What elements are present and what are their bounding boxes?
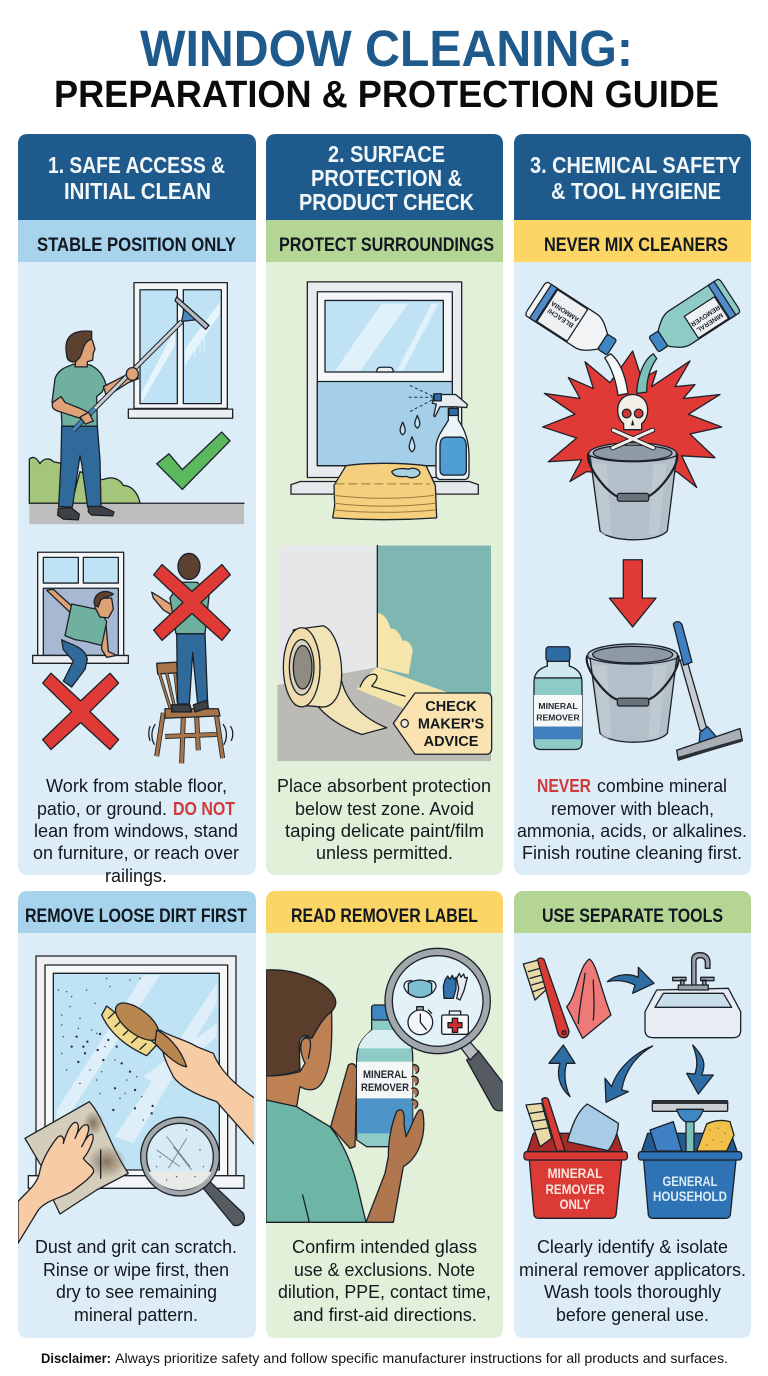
panel: use separate tools [514, 891, 751, 1338]
basket label: general household [653, 1174, 727, 1204]
heading: safe access [18, 134, 256, 220]
tag text: check maker's advice: ADVICE [424, 734, 479, 750]
arrow: to general basket [687, 1045, 713, 1094]
title: PREPARATION & PROTECTION GUIDE [54, 74, 719, 116]
illustration: safe squeegee from ground [29, 283, 244, 524]
body text: never mix: Finish routine cleaning first. [522, 842, 742, 863]
bottle label text: MINERAL [363, 1069, 407, 1081]
subheading: protect surroundings [266, 220, 503, 262]
icon: red brush and cloth [523, 958, 611, 1038]
streams, skull and bucket [588, 354, 677, 627]
tag text: check maker's advice: CHECK [425, 699, 477, 715]
illustration: brushing and wiping dirty window [18, 956, 255, 1243]
heading: chemical safety [514, 134, 751, 220]
basket label: general household: HOUSEHOLD [653, 1189, 727, 1204]
bottle label text [536, 701, 581, 722]
body text: never mix: ammonia, acids, or alkalines. [517, 820, 747, 841]
disclaimer: Disclaimer: [41, 1350, 111, 1366]
body text: remove loose dirt: Rinse or wipe first, then [43, 1259, 229, 1280]
body text: stable position [33, 775, 239, 886]
basket label: general household: GENERAL [662, 1174, 718, 1189]
scrubbing brush [102, 996, 187, 1067]
bottle label text [361, 1069, 409, 1094]
pouring bottle: bleach/ammonia [525, 281, 623, 364]
panel: protect surroundings [266, 134, 503, 875]
basket label: mineral remover only: REMOVER [546, 1182, 605, 1197]
icon: sink [645, 953, 741, 1038]
panel: stable position only [18, 134, 256, 886]
body text: protect surroundings: unless permitted. [316, 842, 453, 863]
subheading: read remover label: READ REMOVER LABEL [291, 905, 478, 927]
illustration: leaning out of window, forbidden [33, 552, 128, 749]
body text: read label: dilution, PPE, contact time, [278, 1281, 491, 1302]
pouring bottle: mineral remover [643, 278, 741, 361]
body text: read label: and first-aid directions. [293, 1304, 477, 1325]
red starburst [543, 351, 722, 487]
icon: red mineral remover basket [524, 1098, 627, 1218]
title: WINDOW CLEANING: [140, 20, 633, 77]
arrow: to sink [607, 967, 654, 993]
subheading: read remover label [266, 891, 503, 933]
illustration: mixing chemicals forbidden [525, 278, 741, 627]
wiping hand [18, 1122, 94, 1243]
body text: stable position: lean from windows, stand [34, 820, 238, 841]
heading: surface protection [266, 134, 503, 220]
bottle label text: REMOVER [361, 1082, 409, 1094]
heading: safe access: INITIAL CLEAN [64, 178, 211, 204]
illustration: masking tape on delicate paint [277, 546, 492, 761]
body text: never mix [517, 775, 747, 863]
pouring bottle: bleach/ammonia: BLEACH/ [547, 307, 575, 328]
brush hand and arm [160, 1030, 255, 1145]
tag text: check maker's advice: MAKER'S [418, 716, 484, 732]
heading: surface protection: 2. SURFACE [328, 141, 445, 167]
body text: protect surroundings [277, 775, 491, 863]
arrow: back to brush [549, 1045, 575, 1097]
panel: read remover label [266, 891, 503, 1338]
body text: never mix: remover with bleach, [551, 798, 714, 819]
body text: protect surroundings: below test zone. Avoid [295, 798, 474, 819]
icon: face mask [404, 980, 436, 997]
body text: stable position: on furniture, or reach over [33, 842, 239, 863]
body text: read label [278, 1236, 491, 1325]
body text: read label: Confirm intended glass [292, 1236, 477, 1257]
bottle label text: REMOVER [536, 712, 581, 722]
subheading: use separate tools: USE SEPARATE TOOLS [542, 905, 723, 927]
basket label: mineral remover only: ONLY [560, 1197, 590, 1212]
arrow: to mineral basket [605, 1046, 653, 1102]
heading: surface protection: PRODUCT CHECK [299, 189, 474, 215]
illustration: mineral remover bottle, clean bucket and squeegee [534, 622, 742, 760]
subheading: protect surroundings: PROTECT SURROUNDINGS [279, 234, 494, 256]
disclaimer: Always prioritize safety and follow specific manufacturer instructions for all products and surfaces. [115, 1350, 728, 1366]
pouring bottle: mineral remover: MINERAL [695, 311, 724, 333]
panel: never mix cleaners [514, 134, 751, 875]
icon: gloves [443, 973, 467, 1000]
subheading: never mix cleaners [514, 220, 751, 262]
body text: remove loose dirt: mineral pattern. [74, 1304, 198, 1325]
subheading: use separate tools [514, 891, 751, 933]
icon: stopwatch [408, 1007, 433, 1035]
illustration: standing on chair, forbidden [149, 553, 233, 763]
pouring bottle: mineral remover: REMOVER [689, 303, 721, 328]
illustration: window with towel and spray bottle [291, 282, 478, 520]
dust specks [58, 978, 153, 1120]
subheading: stable position only: STABLE POSITION ONLY [37, 234, 236, 256]
body text: never mix: combine mineral [597, 775, 727, 796]
bottle label text: MINERAL [538, 701, 578, 711]
subheading: remove loose dirt [18, 891, 256, 933]
illustration: person reading bottle label [266, 948, 503, 1222]
heading: surface protection: PROTECTION & [311, 165, 462, 191]
icon: blue general household basket [638, 1101, 742, 1218]
body text: remove loose dirt: Dust and grit can scratch. [35, 1236, 237, 1257]
body text: protect surroundings: Place absorbent protection [277, 775, 491, 796]
title [54, 20, 719, 116]
body text: never mix: NEVER [537, 775, 591, 796]
body text: stable position: DO NOT [173, 798, 236, 819]
icon: first-aid kit [442, 1011, 468, 1034]
body text: stable position: railings. [105, 865, 167, 886]
body text: remove loose dirt [35, 1236, 237, 1325]
body text: stable position: patio, or ground. [37, 798, 167, 819]
body text: separate tools: mineral remover applicators. [519, 1259, 746, 1280]
panel: remove loose dirt [18, 891, 256, 1338]
basket label: mineral remover only [546, 1166, 605, 1212]
basket label: mineral remover only: MINERAL [548, 1166, 602, 1181]
body text: protect surroundings: taping delicate paint/film [285, 820, 484, 841]
tag text: check maker's advice [418, 699, 484, 750]
illustration: separate tool cycle [523, 953, 742, 1218]
body text: read label: use & exclusions. Note [294, 1259, 475, 1280]
heading: chemical safety: & TOOL HYGIENE [551, 178, 721, 204]
body text: remove loose dirt: dry to see remaining [56, 1281, 217, 1302]
heading: safe access: 1. SAFE ACCESS & [48, 152, 225, 178]
pouring bottle: bleach/ammonia: AMMONIA [550, 299, 581, 323]
subheading: stable position only [18, 220, 256, 262]
subheading: never mix cleaners: NEVER MIX CLEANERS [544, 234, 728, 256]
body text: separate tools: Wash tools thoroughly [544, 1281, 722, 1302]
subheading: remove loose dirt: REMOVE LOOSE DIRT FIRST [25, 905, 247, 927]
body text: separate tools: Clearly identify & isolate [537, 1236, 728, 1257]
body text: separate tools: before general use. [556, 1304, 709, 1325]
magnifier showing scratches [141, 1117, 244, 1226]
body text: separate tools [519, 1236, 746, 1325]
dirty cloth [25, 1102, 128, 1214]
body text: stable position: Work from stable floor, [46, 775, 227, 796]
